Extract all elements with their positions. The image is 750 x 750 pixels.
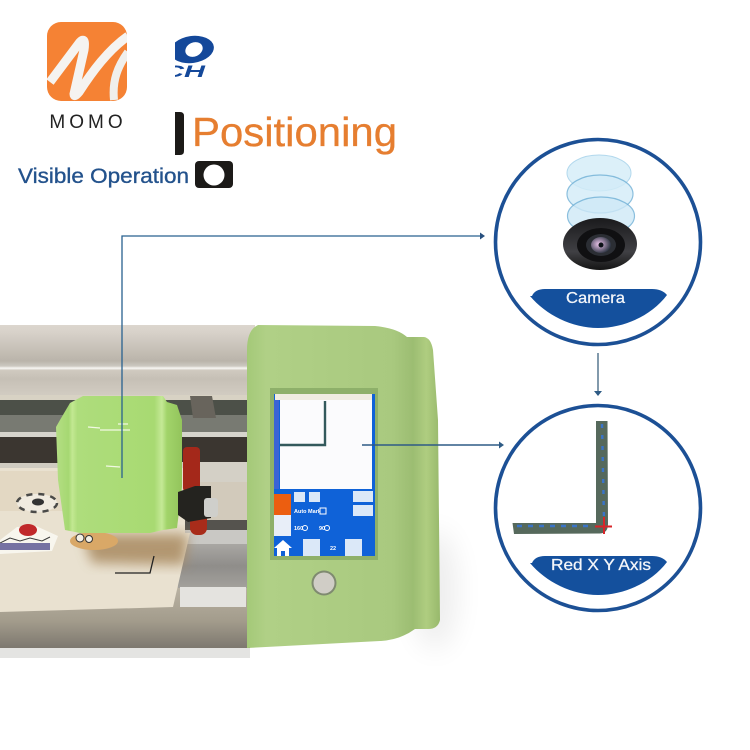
touch screen (274, 394, 375, 556)
partial brand logo (175, 36, 214, 77)
camera label banner: Camera (566, 290, 625, 307)
green control panel (247, 325, 440, 648)
icon: orange rounded square with M (47, 22, 128, 101)
machine lower base (0, 462, 250, 658)
icon: home (274, 540, 292, 556)
character sticker (70, 532, 118, 550)
cake sticker (0, 524, 58, 554)
camera label banner (530, 289, 667, 328)
screen bezel (270, 388, 378, 560)
heading: Positioning: Positioning (192, 109, 397, 155)
logo text: MOMO (49, 112, 127, 133)
axis label banner: Red X Y Axis (551, 557, 651, 574)
machine photo (0, 325, 457, 658)
touch screen: 90 (319, 526, 325, 532)
connector: camera to axis circle (594, 353, 602, 396)
axis mark with red cross (512, 421, 612, 534)
logo: MOMO badge (47, 22, 128, 133)
icon: camera lens with rings (563, 155, 637, 270)
machine top rail (0, 325, 255, 397)
football sticker (17, 494, 57, 512)
touch screen: Auto Mark (294, 509, 322, 515)
panel: camera circle (496, 140, 700, 344)
machine dark carriage slot (0, 395, 250, 471)
round power button (312, 570, 336, 596)
connector: screen to axis circle (362, 442, 504, 448)
subheading: Visible Operation: Visible Operation (18, 164, 189, 188)
sticker sheet (0, 468, 190, 612)
green cutter head (56, 396, 182, 533)
partial brand logo: CH (163, 63, 207, 81)
panel shadow (413, 530, 457, 650)
touch screen: 160 (294, 526, 303, 532)
red pen holder (178, 447, 218, 535)
panel: red X Y axis circle (496, 406, 700, 610)
icon: black tag with white gear (195, 161, 233, 188)
touch screen: 22 (330, 546, 336, 552)
axis line on screen (280, 401, 325, 445)
black tag fragment before heading (175, 112, 184, 155)
axis label banner (530, 556, 667, 595)
registration corner mark (115, 556, 154, 573)
connector: head to camera (122, 232, 485, 478)
